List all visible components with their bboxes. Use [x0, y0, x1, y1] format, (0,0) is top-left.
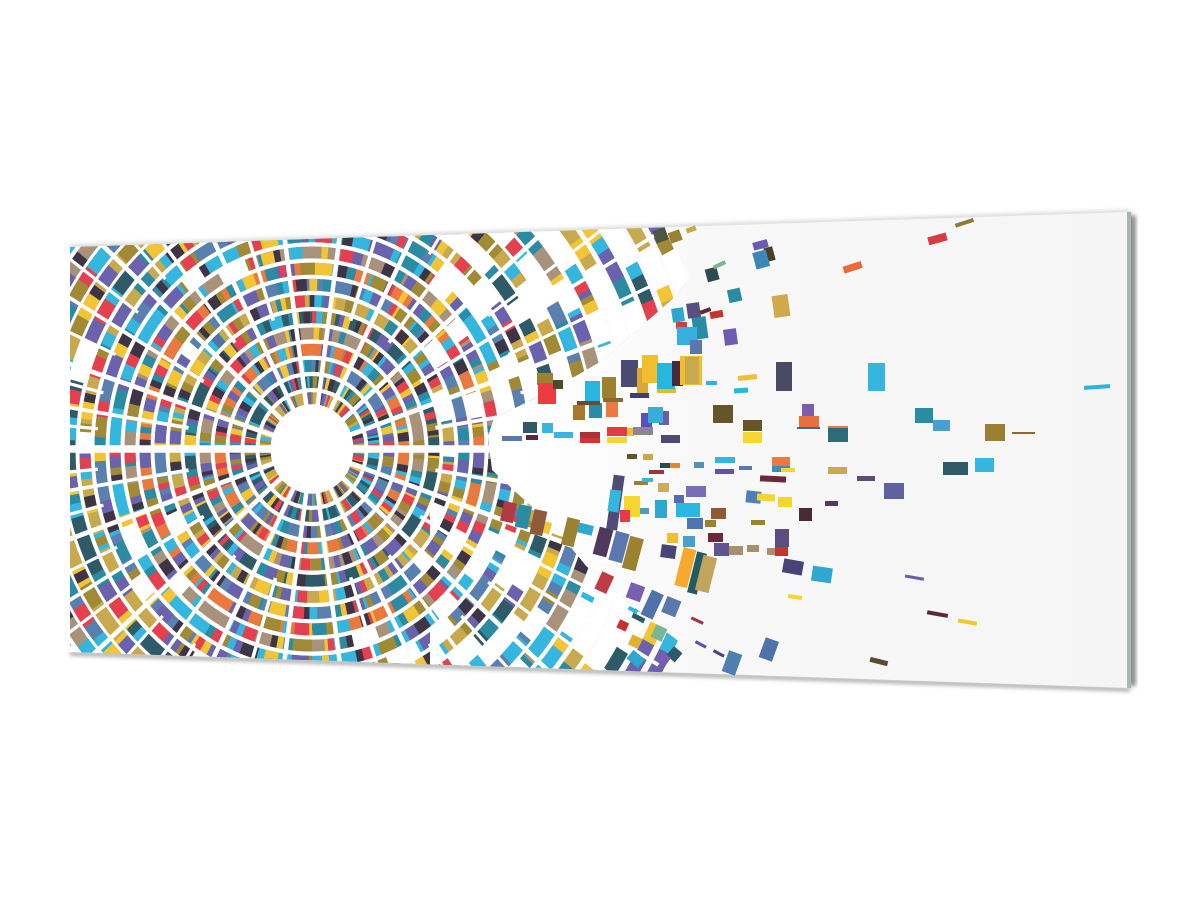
radial spoke gaps — [70, 231, 884, 670]
central hole — [272, 406, 352, 492]
scattered blocks: bottom fragments — [594, 571, 802, 676]
scattered blocks: upper middle cluster — [502, 225, 792, 443]
glass panel with edge shadows — [70, 210, 1136, 691]
ring base colours, inner — [80, 235, 538, 664]
outer rings — [70, 227, 688, 672]
circular genome rings — [70, 227, 688, 672]
outer spoke gaps — [70, 229, 884, 670]
sparse fragments on the right side of the rings — [430, 228, 644, 670]
scattered blocks: lower middle cluster — [500, 454, 833, 595]
ring colour stripes, inner — [80, 235, 538, 664]
missing cells across rings — [71, 232, 570, 664]
scattered blocks: far right — [751, 218, 1110, 666]
secondary spoke gaps — [70, 234, 976, 672]
